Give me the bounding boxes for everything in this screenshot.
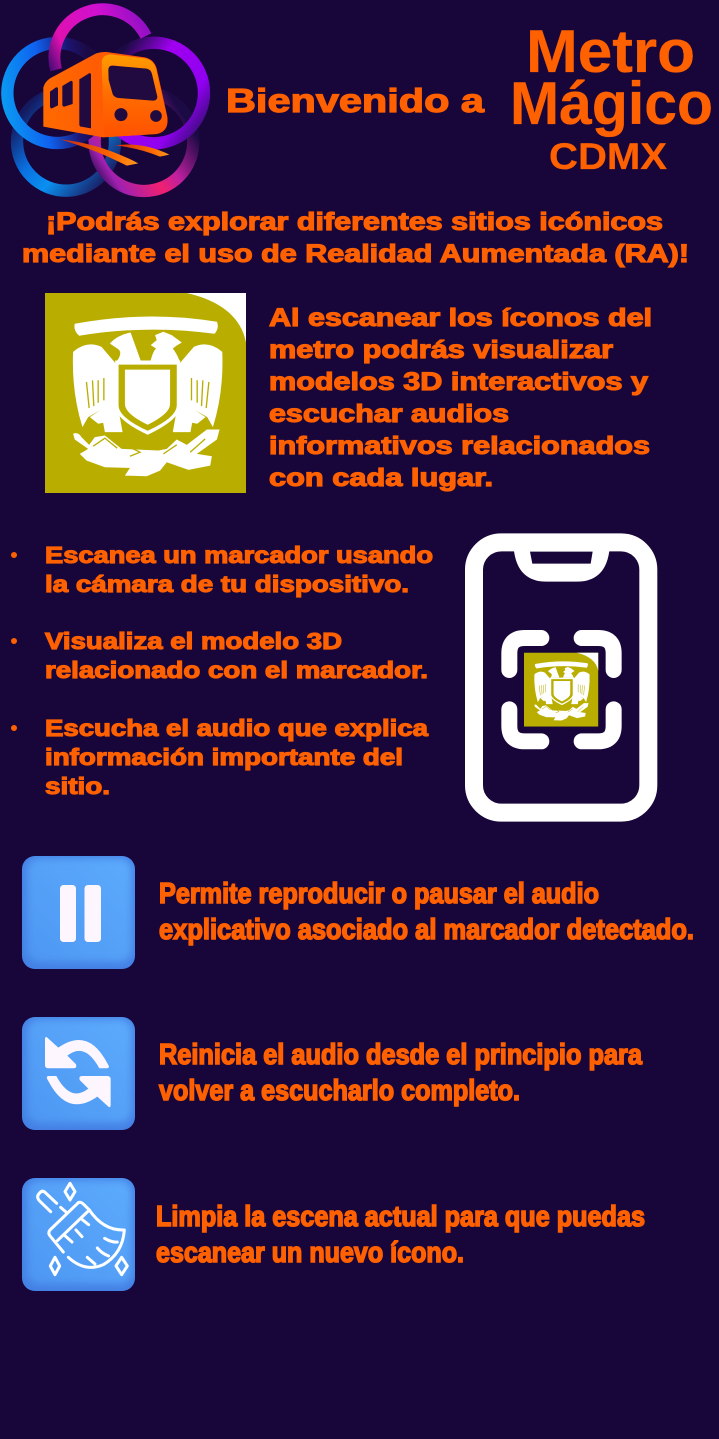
icon: clear scene broom button <box>22 1178 135 1291</box>
logo: Metro Mágico interlaced rings and train <box>7 9 204 191</box>
logo ring: right purple <box>103 43 204 143</box>
description paragraph: Al escanear los íconos del <box>269 304 652 332</box>
restart description: Reinicia el audio desde el principio para <box>159 1039 643 1071</box>
intro text: mediante el uso de Realidad Aumentada (RA)! <box>22 240 689 268</box>
pause description <box>159 878 694 946</box>
description paragraph: escuchar audios <box>269 400 509 428</box>
icon: phone scanning a marker <box>474 538 648 813</box>
description paragraph <box>269 304 652 492</box>
bullet: visualize <box>11 628 428 683</box>
bullet: listen: Escucha el audio que explica <box>45 715 429 741</box>
bullet: scan <box>11 542 433 597</box>
intro text: ¡Podrás explorar diferentes sitios icónicos <box>46 208 663 236</box>
logo ring: left blue <box>7 43 107 143</box>
description paragraph: metro podrás visualizar <box>269 336 613 364</box>
bullet: visualize: Visualiza el modelo 3D <box>45 628 342 654</box>
heading: Bienvenido a: Bienvenido a <box>226 82 485 119</box>
logo ring: top magenta <box>54 9 146 70</box>
icon: restart button <box>22 1017 135 1130</box>
description paragraph: con cada lugar. <box>269 464 493 492</box>
bullet list of steps <box>11 542 433 799</box>
UNAM crest marker image <box>45 293 246 493</box>
logo ring: bottom right magenta <box>95 92 193 191</box>
bullet: listen: sitio. <box>45 773 110 799</box>
restart description <box>159 1039 643 1107</box>
description paragraph: modelos 3D interactivos y <box>269 368 648 396</box>
pause description: Permite reproducir o pausar el audio <box>159 878 599 910</box>
heading: Metro Mágico CDMX wordmark: CDMX <box>549 136 667 177</box>
intro text <box>22 208 689 268</box>
bullet: scan: la cámara de tu dispositivo. <box>45 571 409 597</box>
heading: Metro Mágico CDMX wordmark: Metro <box>526 18 695 85</box>
logo: train <box>43 52 168 137</box>
heading: Metro Mágico CDMX wordmark <box>510 18 713 177</box>
restart description: volver a escucharlo completo. <box>159 1075 520 1107</box>
bullet: visualize: relacionado con el marcador. <box>45 657 428 683</box>
heading: Metro Mágico CDMX wordmark: Mágico <box>510 70 713 137</box>
bullet: listen <box>11 715 429 799</box>
description paragraph: informativos relacionados <box>269 432 650 460</box>
icon: pause button <box>22 856 135 969</box>
logo ring: bottom left blue <box>17 93 115 191</box>
clear scene description <box>156 1201 645 1269</box>
clear scene description: Limpia la escena actual para que puedas <box>156 1201 645 1233</box>
bullet: listen: información importante del <box>45 744 403 770</box>
clear scene description: escanear un nuevo ícono. <box>156 1237 464 1269</box>
logo: train tracks <box>60 139 169 166</box>
bullet: scan: Escanea un marcador usando <box>45 542 433 568</box>
